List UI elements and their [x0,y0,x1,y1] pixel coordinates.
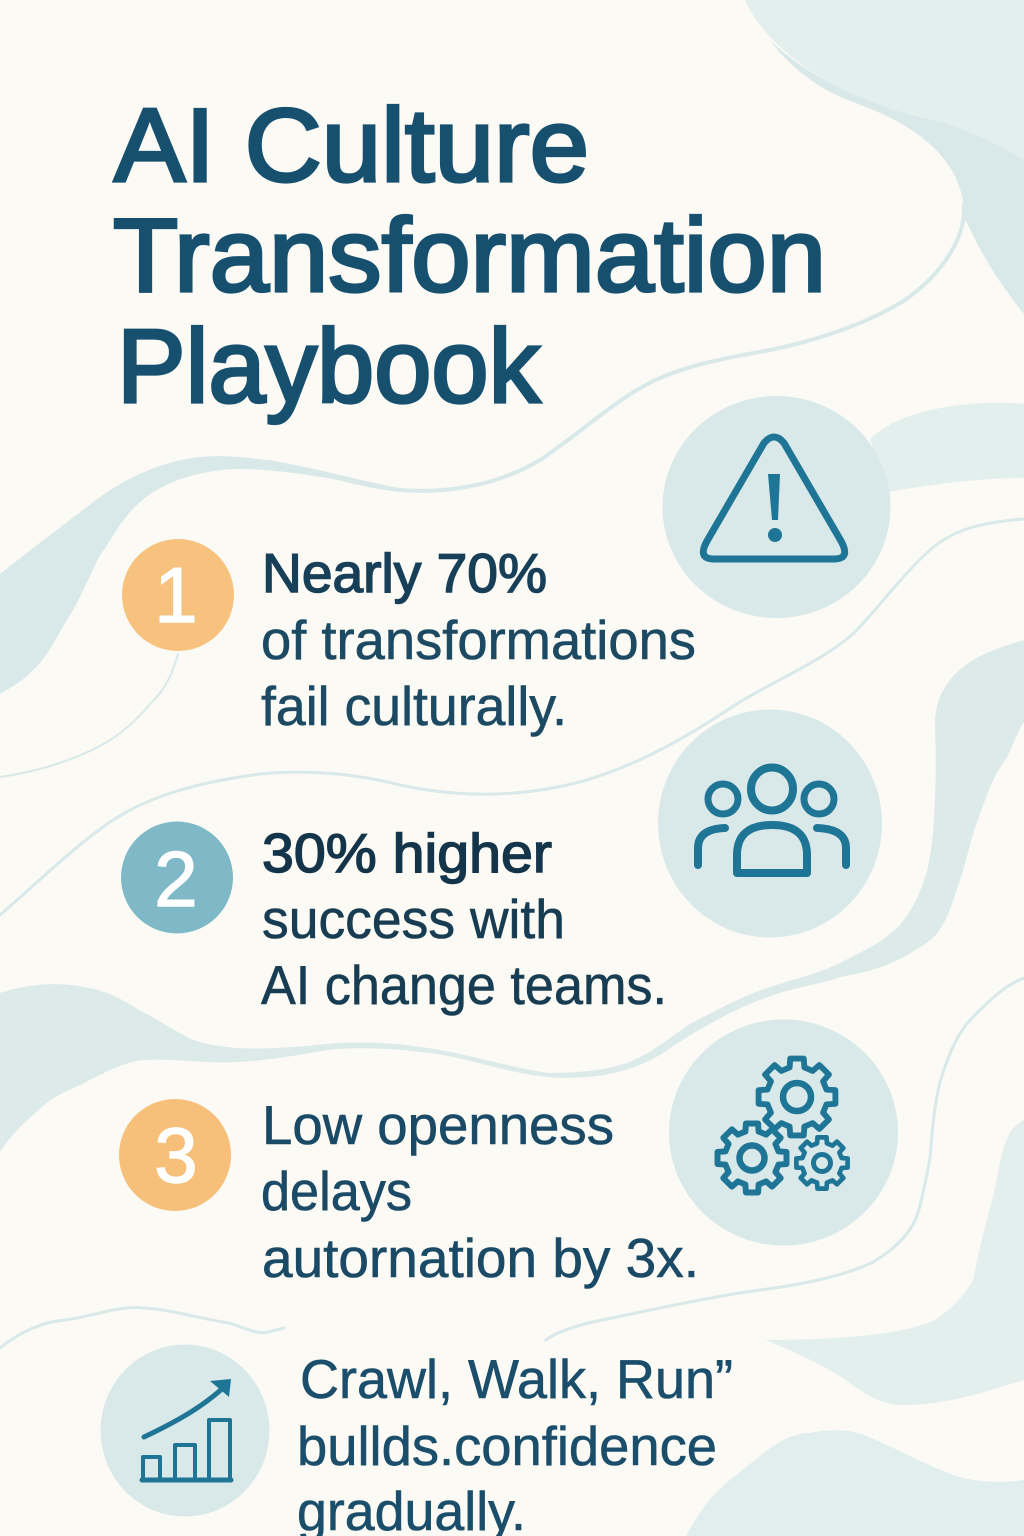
icon: warning triangle [703,437,845,559]
title [113,88,826,425]
item 4 text [297,1348,733,1536]
item 1 badge: 1 [154,551,198,639]
item 2 text: success with [262,888,565,950]
title: Playbook [117,309,541,425]
item 3 badge [119,1099,231,1211]
icon: three people [698,768,846,873]
title: Transformation [113,198,826,314]
item 2 text: AI change teams. [261,954,667,1016]
icon: rising bar chart [142,1379,231,1480]
item 1 text: fail culturally. [261,675,567,737]
item 2 text: 30% higher [262,822,552,884]
item 4 text: Crawl, Walk, Run” [300,1348,733,1410]
icon circle: team [658,710,882,938]
item 3 text: autornation by 3x. [262,1227,699,1289]
item 1 text: of transformations [261,609,696,671]
item 4 text: bullds.confidence [297,1415,717,1477]
icon circle: gears [669,1020,898,1246]
title: AI Culture [114,88,589,204]
item 3 text: delays [261,1160,412,1222]
icon circle: growth chart [100,1344,270,1516]
item 1 text [261,542,696,737]
item 1 badge [122,539,234,651]
icon: three gears [718,1059,848,1192]
icon circle: warning [662,396,890,618]
item 3 badge: 3 [154,1111,198,1199]
item 2 badge [121,822,233,934]
item 3 text: Low openness [262,1094,614,1156]
item 1 text: Nearly 70% [262,542,547,604]
item 2 badge: 2 [154,835,198,923]
item 3 text [261,1094,699,1289]
item 2 text [261,822,667,1016]
